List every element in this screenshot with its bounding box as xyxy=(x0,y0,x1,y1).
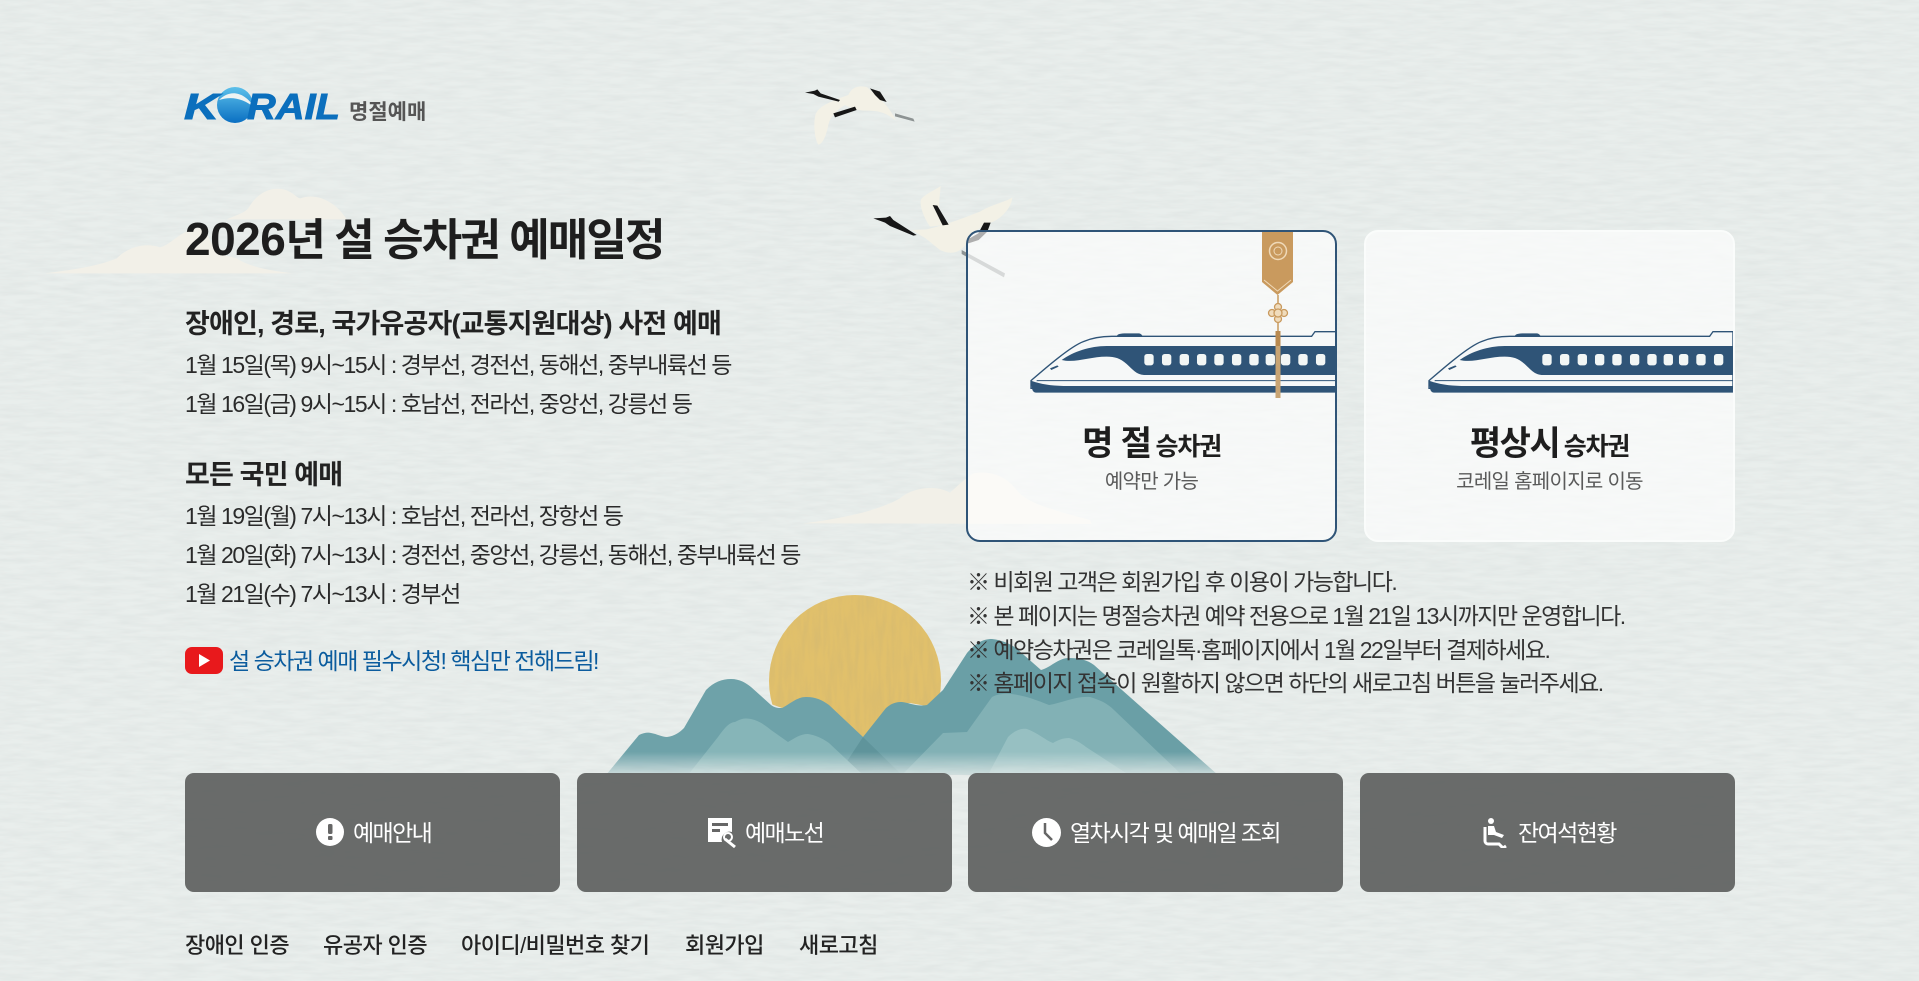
link: find ID and password: 아이디/비밀번호 찾기 xyxy=(461,933,649,958)
notice line 3: ※ 예약승차권은 코레일톡·홈페이지에서 1월 22일부터 결제하세요. xyxy=(967,637,1549,663)
panel: holiday ticket card xyxy=(966,230,1337,542)
icon: seated person xyxy=(1484,818,1507,848)
button label: 예매노선 xyxy=(745,820,823,846)
icon: clock xyxy=(1032,818,1061,847)
link: disability verification: 장애인 인증 xyxy=(185,933,289,958)
schedule line: January 16: 1월 16일(금) 9시~15시 : 호남선, 전라선, 중앙선, 강릉선 등 xyxy=(185,391,692,417)
heading: advance reservation: 장애인, 경로, 국가유공자(교통지원대상) 사전 예매 xyxy=(185,309,721,339)
icon: train xyxy=(1030,331,1335,393)
cloud: behind reservation card xyxy=(806,479,966,524)
schedule line: January 15: 1월 15일(목) 9시~15시 : 경부선, 경전선, 동해선, 중부내륙선 등 xyxy=(185,352,731,378)
card subtitle: 예약만 가능 xyxy=(1105,471,1198,493)
logo wordmark: K xyxy=(184,86,223,126)
logo caption: 명절예매 xyxy=(349,101,426,124)
button label: 예매안내 xyxy=(353,820,431,846)
button: remaining seats xyxy=(1360,773,1735,892)
button label: 잔여석현황 xyxy=(1518,820,1616,846)
logo: KORAIL 명절예매 xyxy=(184,86,426,126)
heading: general reservation: 모든 국민 예매 xyxy=(185,460,342,490)
icon: document search xyxy=(708,818,736,848)
footer links xyxy=(185,933,878,958)
icon: train xyxy=(1428,331,1733,393)
panel: regular ticket card xyxy=(1364,230,1735,542)
schedule line: January 19: 1월 19일(월) 7시~13시 : 호남선, 전라선, 장항선 등 xyxy=(185,503,623,529)
logo wordmark xyxy=(184,86,340,126)
schedule line: January 21: 1월 21일(수) 7시~13시 : 경부선 xyxy=(185,581,460,607)
video link text: 설 승차권 예매 필수시청! 핵심만 전해드림! xyxy=(229,648,598,674)
icon: gold tassel ornament xyxy=(1262,232,1293,398)
schedule line: January 20: 1월 20일(화) 7시~13시 : 경전선, 중앙선, 강릉선, 동해선, 중부내륙선 등 xyxy=(185,542,800,568)
logo wordmark: RAIL xyxy=(247,86,340,126)
video link xyxy=(185,647,598,674)
link: refresh: 새로고침 xyxy=(799,933,878,958)
card subtitle: 코레일 홈페이지로 이동 xyxy=(1456,471,1643,493)
notice line 2: ※ 본 페이지는 명절승차권 예약 전용으로 1월 21일 13시까지만 운영합니다. xyxy=(967,603,1625,629)
icon: sun xyxy=(769,595,941,737)
notice line 1: ※ 비회원 고객은 회원가입 후 이용이 가능합니다. xyxy=(967,569,1396,595)
icon: lower crane xyxy=(874,186,1012,278)
button: reservation routes xyxy=(577,773,952,892)
notice line 4: ※ 홈페이지 접속이 원활하지 않으면 하단의 새로고침 버튼을 눌러주세요. xyxy=(967,670,1603,696)
card title: 평상시 승차권 xyxy=(1470,425,1629,463)
icon: video play xyxy=(185,647,223,674)
icon: exclamation xyxy=(316,818,344,846)
cloud: behind title xyxy=(50,189,346,274)
icon: upper crane xyxy=(805,86,914,144)
link: sign up: 회원가입 xyxy=(685,933,764,958)
card title: 명 절 승차권 xyxy=(1082,425,1221,463)
button: reservation guide xyxy=(185,773,560,892)
link: veteran verification: 유공자 인증 xyxy=(323,933,427,958)
title: 2026년 설 승차권 예매일정 xyxy=(185,213,664,265)
notice block xyxy=(967,569,1625,696)
mountains xyxy=(608,639,1216,775)
button label: 열차시각 및 예매일 조회 xyxy=(1070,820,1280,846)
button: train times lookup xyxy=(968,773,1343,892)
